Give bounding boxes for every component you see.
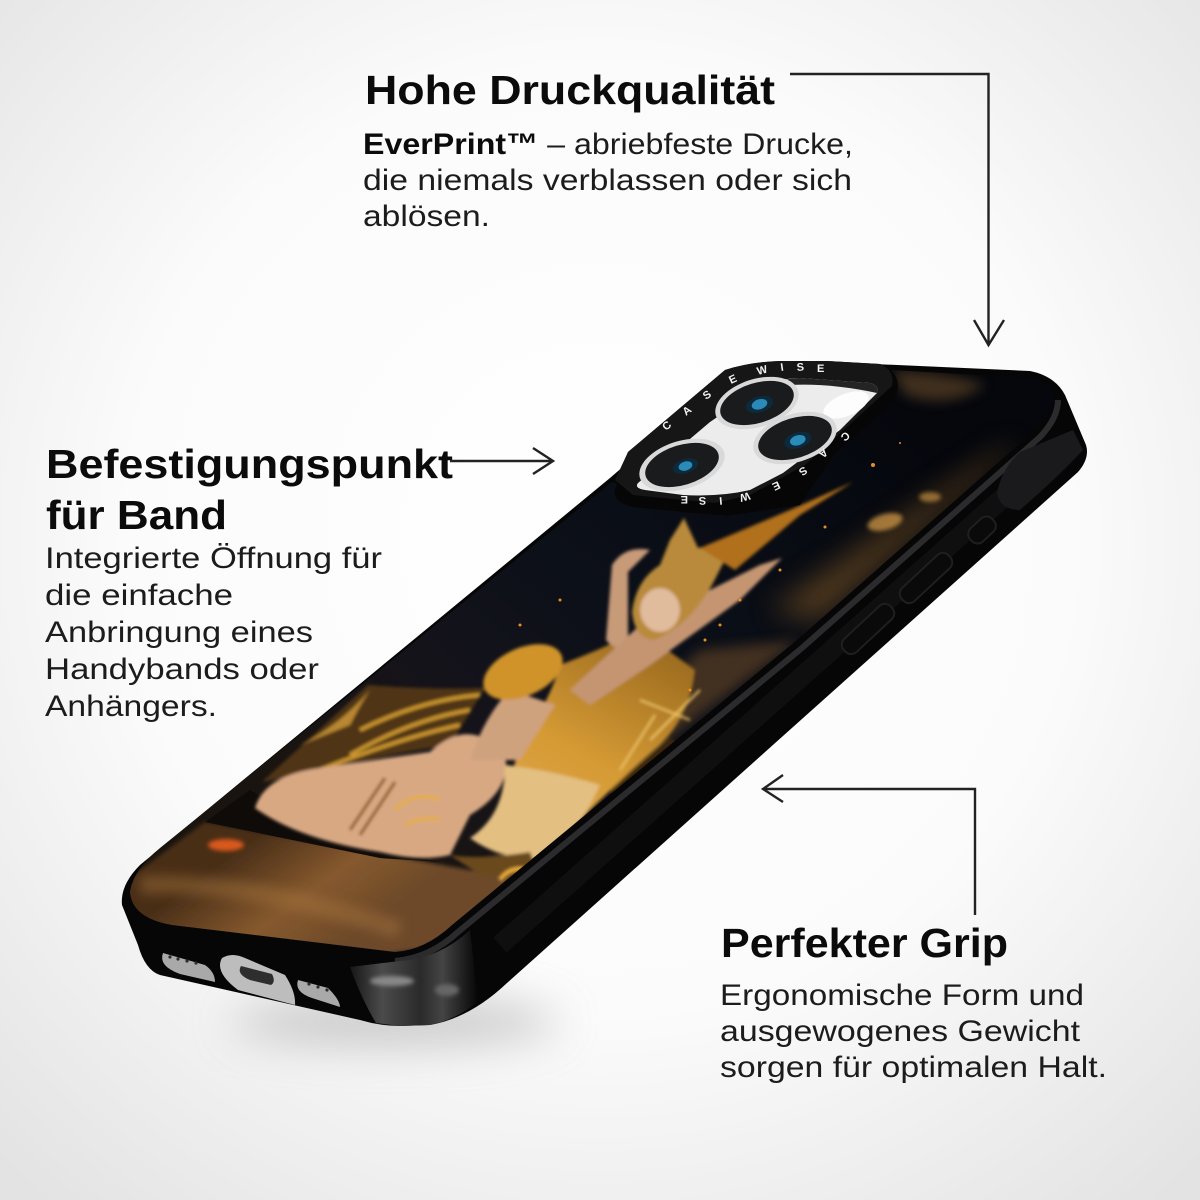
artwork screen [130, 370, 1014, 952]
body text: Anhängers. [45, 690, 217, 723]
brand text bottom: CASEWISE [681, 429, 852, 506]
heading: Befestigungspunkt [46, 441, 453, 487]
body text [720, 979, 1107, 1084]
body text: Ergonomische Form und [720, 979, 1084, 1012]
arrow: strap point [450, 448, 553, 474]
raised forms [606, 549, 650, 648]
dark inner top band [748, 378, 878, 394]
case body [122, 362, 1087, 1026]
lens top [709, 367, 805, 439]
body text: Handybands oder [45, 653, 319, 686]
speaker left [162, 953, 215, 982]
lower right warm haze [492, 636, 796, 857]
dark ground strip [205, 790, 440, 862]
arrow: print quality [790, 74, 1004, 345]
flowing golden mane [512, 642, 697, 821]
heading: Perfekter Grip [721, 920, 1008, 966]
brand text top: CASEWISE [660, 361, 824, 433]
lens left [633, 429, 731, 501]
phone case illustration [100, 350, 1100, 1026]
callout: Perfekter Grip [720, 920, 1107, 1084]
heading: Hohe Druckqualität [365, 67, 775, 113]
sparks [518, 442, 901, 692]
speaker right [297, 980, 340, 1007]
body text: ablösen. [363, 200, 490, 233]
warm floor [120, 822, 560, 955]
left golden strands [262, 685, 485, 782]
callout: Hohe Druckqualität [363, 67, 853, 233]
lens right [747, 402, 843, 474]
distant light glow [770, 440, 1020, 620]
body text: die einfache [45, 579, 233, 612]
warm abstract form [255, 734, 506, 858]
strap attachment point [997, 430, 1083, 510]
heading: für Band [46, 492, 227, 538]
abstract golden figure [255, 482, 853, 880]
camera opening [637, 378, 878, 495]
body text: sorgen für optimalen Halt. [720, 1051, 1107, 1084]
bottom ports [162, 953, 340, 1007]
head and crown [632, 518, 735, 640]
callout: Befestigungspunkt [45, 441, 453, 723]
heading [46, 441, 453, 538]
body text: Integrierte Öffnung für [45, 542, 382, 575]
phone shadow [230, 998, 560, 1046]
body text: die niemals verblassen oder sich [363, 164, 852, 197]
charging port [220, 955, 295, 1005]
central gold shape [480, 642, 565, 702]
side buttons [838, 513, 999, 657]
shiny bottom corner [350, 930, 478, 1026]
side rim highlight [395, 400, 1058, 961]
camera island [615, 361, 898, 515]
body text: ausgewogenes Gewicht [720, 1015, 1081, 1048]
body text [363, 128, 853, 233]
body text: Anbringung eines [45, 616, 313, 649]
lower pale wisps [470, 765, 600, 860]
body text: EverPrint™ – abriebfeste Drucke, [363, 128, 853, 161]
arrow: grip [763, 775, 975, 915]
rubber side band [500, 447, 1060, 945]
body text [45, 542, 382, 723]
